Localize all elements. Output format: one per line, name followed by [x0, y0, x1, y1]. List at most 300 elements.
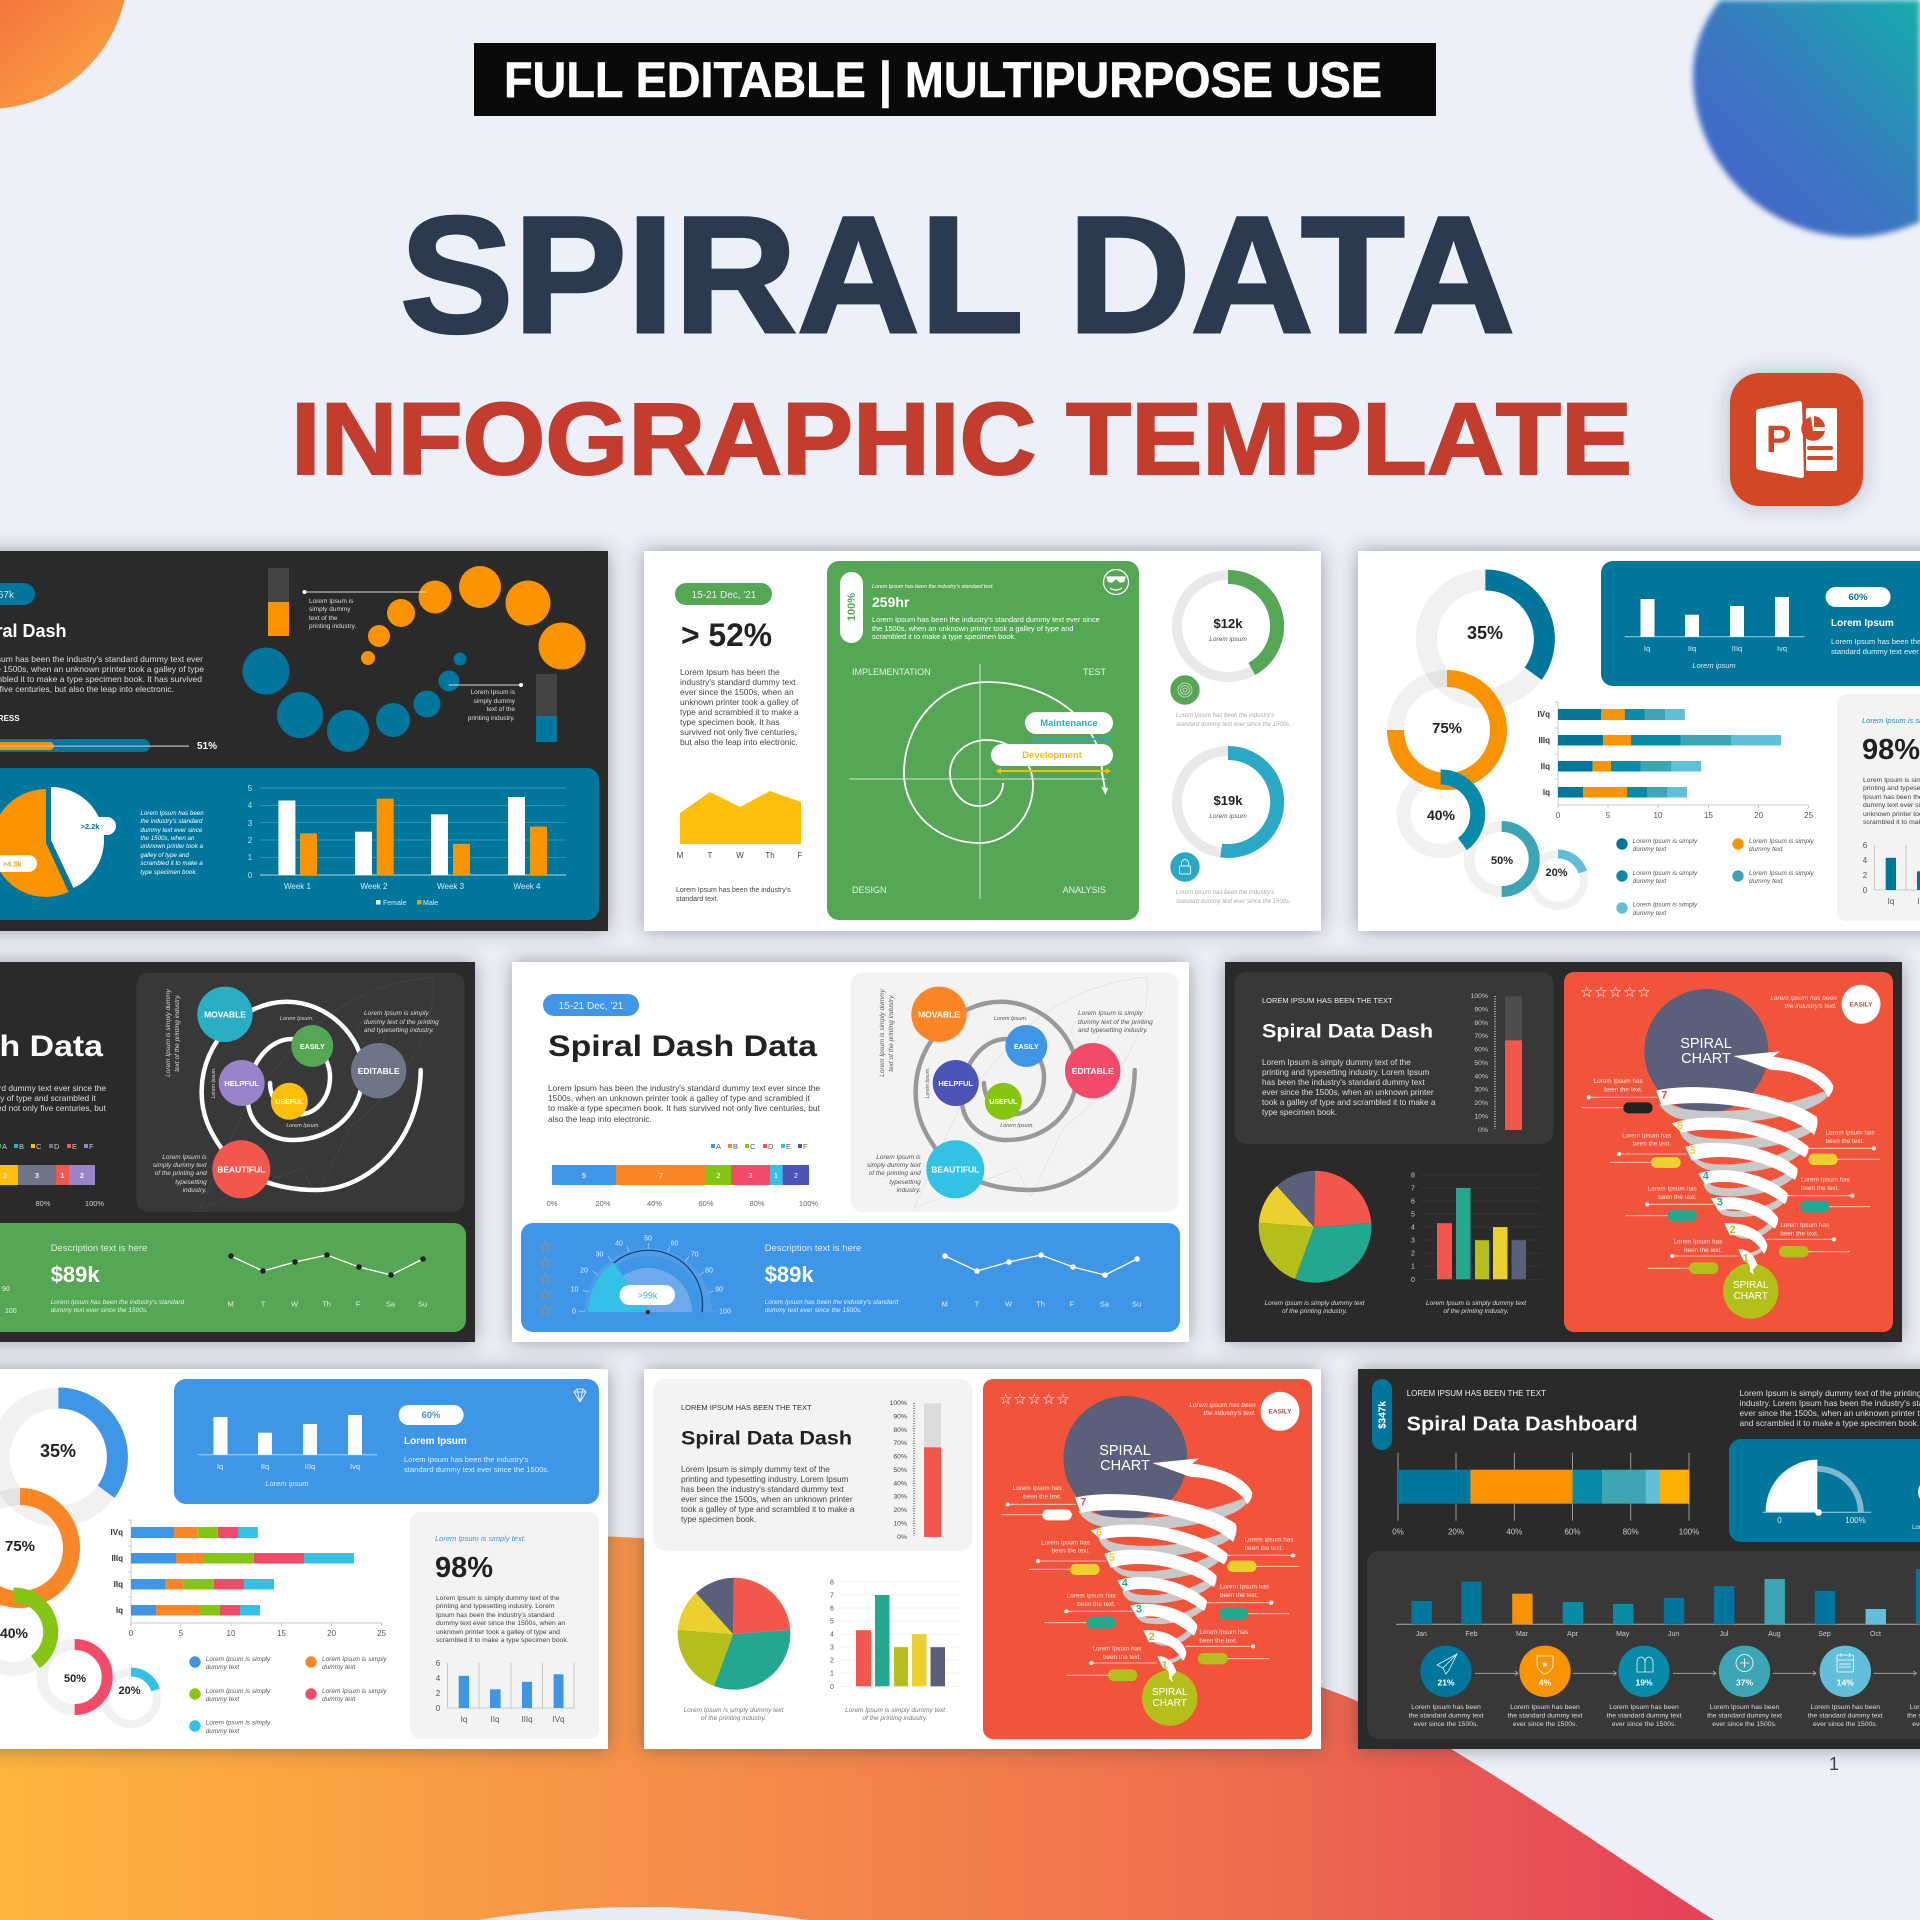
legend: Lorem Ipsum is simply: [206, 1720, 271, 1726]
panel heading text: the 1500s, when an unknown printer took a galley of type and: [872, 624, 1073, 633]
callout bottom: printing industry.: [468, 715, 515, 722]
gauge: [571, 1236, 731, 1316]
subtitle: INFOGRAPHIC TEMPLATE: [291, 382, 1632, 496]
tornado ribbon: Lorem Ipsum has: [1594, 1078, 1643, 1085]
panel: 98% stat: 98%: [1862, 734, 1920, 766]
bar caption: Lorem Ipsum is simply dummy text: [1426, 1300, 1527, 1307]
tornado ribbon: been the text.: [1604, 1086, 1643, 1093]
panel: green lower: Description text is here: [51, 1243, 147, 1254]
bubble notes: Lorem Ipsum is simply: [1078, 1010, 1143, 1017]
bubble notes: industry.: [897, 1187, 921, 1194]
step: 19%: [1618, 1646, 1670, 1697]
panel: 98% stat: scrambled it to make a type specimen book.: [436, 1637, 569, 1644]
tornado ribbon: 3: [1717, 1197, 1723, 1209]
percent scale bar: 40%: [1474, 1073, 1488, 1080]
footnote: Lorem Ipsum has been the industry's: [676, 887, 791, 894]
bubble: easily: EASILY: [1014, 1044, 1039, 1051]
bubble notes: Lorem Ipsum.: [1000, 1123, 1034, 1129]
paragraph: type specimen book. It has: [680, 717, 780, 727]
stacked horizontal bars: 20: [327, 1629, 337, 1638]
panel: intro: [653, 1379, 972, 1551]
paragraph: to make a type specimen book. It has survived not only five centuries, but: [548, 1103, 821, 1113]
step captions: [1409, 1704, 1920, 1728]
panel: green lower: dummy text ever since the 1500s.: [51, 1307, 148, 1314]
bubble notes: simply dummy text: [153, 1162, 208, 1169]
bubble: movable: MOVABLE: [204, 1010, 246, 1020]
tornado ribbon: been the text.: [1077, 1601, 1116, 1608]
bubble: editable: [351, 1043, 406, 1098]
bar chart: 0: [1411, 1277, 1415, 1284]
panel: 98% stat: Lorem Ipsum is simply dummy text of the: [436, 1595, 560, 1602]
panel: 98% stat: 6: [436, 1659, 441, 1668]
tornado ribbon: been the text.: [1658, 1194, 1697, 1201]
star rating: ☆☆☆☆☆: [999, 1390, 1070, 1408]
step: 37%: [1719, 1646, 1770, 1697]
callout top: text of the: [309, 615, 338, 622]
slide 8: white spiral chart: [644, 1369, 1321, 1749]
stacked bar: 60%: [698, 1199, 714, 1208]
panel: monthly bars: Apr: [1567, 1631, 1579, 1638]
legend: Lorem Ipsum is simply: [1633, 838, 1698, 845]
panel: 98% stat: 2: [436, 1689, 441, 1698]
top circle: SPIRAL: [1099, 1443, 1151, 1459]
bubble: helpful: HELPFUL: [224, 1079, 259, 1088]
panel: gauge: 100%: [1845, 1516, 1866, 1525]
bar chart: Male: [423, 900, 438, 907]
stacked horizontal bars: IIq: [1541, 762, 1550, 771]
legend: B: [19, 1142, 24, 1151]
panel: monthly bars: Sep: [1818, 1631, 1831, 1638]
stacked horizontal bars: IIIq: [111, 1554, 123, 1563]
progress bar: [0, 714, 217, 752]
panel: 98% stat: 4: [436, 1674, 441, 1683]
caption: Lorem Ipsum has been the industry's: [1176, 890, 1274, 896]
legend: Lorem Ipsum is simply: [1749, 838, 1814, 845]
legend: B: [733, 1142, 738, 1151]
tornado ribbon: 7: [1661, 1089, 1667, 1101]
tornado ribbon: Lorem Ipsum has: [1067, 1593, 1116, 1600]
tornado ribbon: been the text.: [1103, 1654, 1142, 1661]
step captions: the standard dummy text: [1508, 1713, 1583, 1720]
pie chart: [678, 1578, 790, 1690]
development label: Development: [1022, 750, 1083, 761]
gauge: >99k: [638, 1290, 658, 1300]
tornado ribbon: been the text.: [1801, 1185, 1840, 1192]
donut: $12k: [1177, 575, 1279, 677]
panel: spiral tornado: [1564, 972, 1893, 1332]
bar chart: 1: [830, 1670, 834, 1678]
tornado ribbon: been the text.: [1052, 1548, 1090, 1555]
panel: gauge: [1729, 1439, 1920, 1542]
panel: spiral bubbles: [850, 973, 1179, 1212]
bar chart: 5: [830, 1618, 834, 1626]
bar chart: 2: [830, 1658, 834, 1664]
step captions: ever since the 1500s.: [1513, 1721, 1577, 1728]
gauge: 20: [580, 1268, 588, 1274]
title: Spiral Dash Data: [548, 1030, 817, 1063]
italic note: scrambled it to make a: [140, 860, 203, 867]
legend: A: [2, 1142, 7, 1151]
stacked bar: 5: [582, 1171, 586, 1180]
panel: green lower: 100: [5, 1308, 17, 1315]
bubble notes: text of the printing industry.: [888, 994, 895, 1072]
donut: $19k: Lorem ipsum: [1209, 813, 1247, 820]
bubble notes: of the printing and: [155, 1170, 207, 1177]
step arrows: [1475, 1671, 1916, 1676]
panel: blue lower: Description text is here: [765, 1243, 861, 1254]
quadrant labels: DESIGN: [852, 885, 887, 895]
bar chart: Week 3: [437, 882, 465, 891]
bubble notes: [153, 988, 439, 1194]
stacked bar: 2: [716, 1171, 721, 1180]
bubble notes: Lorem Ipsum.: [286, 1123, 320, 1129]
panel: intro: printing and typesetting industry. Lorem Ipsum: [1262, 1068, 1430, 1077]
gauge: 10: [571, 1286, 578, 1294]
easily badge: EASILY: [1850, 1002, 1873, 1008]
panel: quarterly bars: Iq: [217, 1462, 223, 1471]
panel: quarterly bars: Iq: [1644, 644, 1650, 653]
panel: quarterly bars: Lorem Ipsum: [404, 1436, 467, 1447]
donut labels: 20%: [118, 1685, 141, 1697]
panel: 98% stat: Ipsum has been the industry's standard: [436, 1612, 555, 1619]
stacked bar: 3: [35, 1171, 39, 1180]
stacked horizontal bars: 15: [1704, 811, 1713, 820]
maintenance label: Maintenance: [1040, 718, 1098, 729]
bottom circle: [1142, 1670, 1197, 1726]
legend: E: [72, 1142, 77, 1151]
panel: quarterly bars: Lorem Ipsum has been the industry's: [404, 1455, 528, 1464]
slide 2: green spiral model: [644, 551, 1321, 931]
stacked horizontal bars: Iq: [1543, 788, 1550, 797]
bar chart: 2: [248, 836, 253, 845]
slide 7: blue donuts: [0, 1369, 608, 1749]
date pill: [543, 994, 639, 1016]
bubble notes: and typesetting industry.: [1078, 1027, 1148, 1034]
bar chart: 0: [248, 871, 253, 880]
area chart: T: [708, 851, 713, 860]
line chart: W: [291, 1300, 299, 1308]
bubble notes: Lorem Ipsum.: [211, 1068, 217, 1098]
bubble: useful: [985, 1083, 1022, 1120]
legend: C: [750, 1142, 756, 1151]
italic note: the 1500s, when an: [140, 835, 195, 842]
tornado ribbon: 2: [1149, 1631, 1155, 1643]
panel: quarterly bars: 60%: [421, 1410, 441, 1421]
bar chart: Week 4: [514, 882, 541, 891]
percent scale bar: 10%: [1474, 1113, 1488, 1120]
line chart: T: [261, 1300, 266, 1308]
panel: 98% stat: [1837, 694, 1920, 921]
legend: D: [768, 1142, 774, 1151]
panel: 98% stat: [410, 1512, 599, 1739]
bubble notes: text of the printing industry.: [174, 994, 181, 1072]
bubble: movable: [197, 987, 253, 1042]
legend: dummy text: [1749, 846, 1784, 853]
step: 4%: [1519, 1646, 1571, 1697]
stacked bar: 2: [80, 1171, 84, 1180]
bubble: easily: [1005, 1025, 1047, 1067]
line chart: Sa: [386, 1300, 396, 1308]
panel: monthly bars: Aug: [1768, 1631, 1781, 1638]
panel heading text: 259hr: [872, 594, 910, 610]
stacked horizontal bars: IIIq: [1538, 736, 1550, 745]
bar chart: 4: [248, 801, 253, 810]
panel: intro: Spiral Data Dash: [1262, 1021, 1433, 1043]
legend: F: [803, 1142, 808, 1151]
bottom circle: [1723, 1263, 1778, 1319]
spiral: [904, 682, 1108, 843]
legend: dummy text: [1633, 878, 1667, 885]
stacked bar: 40%: [1506, 1528, 1522, 1536]
donut: $19k: [1177, 751, 1279, 853]
panel: quarterly bars: Lorem Ipsum: [1831, 618, 1894, 629]
tornado ribbon: Lorem Ipsum has: [1245, 1537, 1294, 1544]
tornado ribbon: Lorem Ipsum has: [1780, 1222, 1829, 1229]
stacked horizontal bars: IIq: [114, 1580, 123, 1589]
rocket outline: [914, 977, 1147, 1208]
bubble notes: Lorem Ipsum.: [280, 1016, 314, 1022]
step captions: Lorem Ipsum has been: [1510, 1704, 1580, 1711]
tornado ribbon: Lorem Ipsum has: [1801, 1177, 1850, 1184]
donut group: [0, 1398, 157, 1724]
tornado ribbon: Lorem Ipsum has: [1220, 1584, 1269, 1591]
top circle: [1063, 1396, 1187, 1520]
slide 9: spiral data dashboard: [1358, 1369, 1920, 1749]
caption: standard dummy text ever since the 1500s.: [1176, 722, 1291, 728]
stacked horizontal bars: IVq: [1538, 710, 1550, 719]
paragraph: type and scrambled it to make a: [680, 707, 799, 717]
gauge: 30: [596, 1252, 603, 1258]
step: 14%: 14%: [1837, 1678, 1854, 1688]
bar chart: 7: [830, 1592, 834, 1600]
stacked bar: 2: [3, 1171, 7, 1180]
bar caption: of the printing industry.: [862, 1715, 928, 1722]
bubble: helpful: [933, 1060, 979, 1106]
step: 21%: 21%: [1437, 1678, 1455, 1688]
bar caption: of the printing industry.: [1443, 1308, 1509, 1315]
panel: quarterly bars: 60%: [1848, 592, 1868, 603]
tornado ribbon: Lorem Ipsum has: [1092, 1646, 1141, 1653]
legend: dummy text: [1633, 846, 1667, 853]
donut labels: 75%: [1432, 720, 1462, 737]
panel: monthly bars: Feb: [1465, 1631, 1478, 1638]
bar chart: 8: [830, 1580, 834, 1586]
tornado ribbon: Lorem Ipsum has: [1041, 1539, 1090, 1546]
percent scale bar: 70%: [893, 1440, 907, 1447]
gauge: 0: [572, 1308, 576, 1316]
legend: [189, 1656, 387, 1735]
paragraph: unknown printer took a galley of: [680, 697, 799, 707]
tornado ribbon: 5: [1109, 1552, 1115, 1564]
callout top: [302, 590, 426, 630]
line chart: M: [227, 1300, 234, 1308]
bottom gradient wave: [0, 1533, 1714, 1920]
line chart: [227, 1252, 427, 1308]
bubble notes: Lorem Ipsum is: [162, 1154, 207, 1161]
panel: intro: has been the industry's standard dummy text: [1262, 1078, 1425, 1087]
panel: quarterly bars: Ivq: [350, 1462, 360, 1471]
panel: quarterly bars: Ivq: [1777, 644, 1787, 653]
bar chart: [1411, 1172, 1541, 1284]
legend: A: [716, 1142, 721, 1151]
percent scale bar: 30%: [1474, 1087, 1488, 1094]
tornado ribbon: Lorem Ipsum has: [1826, 1130, 1875, 1137]
top-left corner blob: [0, 0, 124, 108]
bubble: beautiful: [926, 1140, 984, 1198]
panel: 98% stat: Lorem Ipsum is simply text.: [435, 1534, 526, 1543]
bubble notes: Lorem Ipsum is simply dummy: [165, 988, 172, 1077]
legend: Lorem Ipsum is simply: [206, 1688, 271, 1695]
panel: monthly bars: Jun: [1668, 1631, 1679, 1638]
legend: D: [54, 1142, 60, 1151]
step captions: the standard dummy text: [1409, 1713, 1484, 1720]
pie caption: Lorem Ipsum is simply dummy text: [1265, 1300, 1366, 1307]
percent scale bar: 30%: [893, 1494, 907, 1501]
tornado ribbon: 1: [1743, 1253, 1749, 1265]
step captions: the standard dummy text: [1607, 1713, 1682, 1720]
bubble notes: simply dummy text: [867, 1162, 922, 1169]
rocket outline: [200, 977, 433, 1208]
spiral: [916, 1002, 1135, 1190]
panel: intro: type specimen book.: [681, 1515, 756, 1524]
stacked horizontal bars: 25: [377, 1629, 387, 1638]
spiral bubbles: [242, 566, 586, 752]
icon: powerpoint: P: [1766, 419, 1791, 461]
bar chart: 2: [1411, 1250, 1415, 1258]
stacked bar: 3: [748, 1171, 753, 1180]
star rating: ☆☆☆☆☆: [1580, 983, 1651, 1001]
paragraph: Lorem Ipsum has been the industry's standard dummy text ever since the: [548, 1083, 820, 1093]
percent scale bar: 80%: [893, 1427, 907, 1434]
date pill: 15-21 Dec, '21: [559, 1001, 624, 1012]
panel: monthly bars: [1367, 1551, 1920, 1739]
pie chart: >4.3k: [3, 860, 22, 868]
tornado ribbon: 2: [1730, 1224, 1736, 1236]
panel: monthly bars: Jul: [1720, 1631, 1729, 1638]
tornado ribbon: 3: [1136, 1604, 1142, 1616]
top circle: CHART: [1681, 1051, 1731, 1067]
panel: blue lower: $89k: [765, 1262, 814, 1287]
panel: 98% stat: IIIq: [521, 1715, 533, 1724]
legend: [1616, 838, 1814, 917]
slide 6: dark spiral chart: [1225, 962, 1902, 1342]
percent scale bar: 100%: [1471, 993, 1488, 1000]
stacked bar: 0%: [547, 1199, 558, 1208]
panel: quarterly bars: [174, 1379, 599, 1504]
area chart: F: [798, 851, 803, 860]
bar chart: 4: [830, 1632, 834, 1638]
top circle: SPIRAL: [1680, 1036, 1732, 1052]
bubble notes: and typesetting industry.: [364, 1027, 434, 1034]
percent scale bar: 40%: [893, 1480, 907, 1487]
quadrant labels: IMPLEMENTATION: [852, 667, 931, 677]
legend: dummy text: [322, 1664, 357, 1671]
percent scale bar: [890, 1400, 941, 1541]
slide 1: dark spiral dash: [0, 551, 608, 931]
caption: standard dummy text ever since the 1500s.: [1176, 899, 1291, 905]
top banner: FULL EDITABLE | MULTIPURPOSE USE: [504, 52, 1382, 109]
bar chart: 0: [830, 1684, 834, 1691]
bubble notes: Lorem Ipsum is: [876, 1154, 921, 1161]
panel: green spiral: [827, 561, 1139, 920]
panel: intro: type specimen book.: [1262, 1108, 1337, 1117]
paragraph: also the leap into electronic.: [548, 1114, 652, 1124]
panel: quarterly bars: IIq: [1688, 644, 1696, 653]
callout bottom: Lorem Ipsum is: [471, 689, 516, 696]
legend: [711, 1142, 808, 1151]
paragraph: and scrambled it to make a type specimen book.: [1740, 1418, 1919, 1428]
gauge: 80: [705, 1268, 713, 1274]
line chart: Sa: [1100, 1300, 1110, 1308]
tornado ribbon: been the text.: [1220, 1592, 1259, 1599]
quadrant labels: [852, 667, 1106, 895]
date pill: [675, 583, 772, 605]
tornado ribbon: Lorem Ipsum has: [1013, 1485, 1062, 1492]
panel heading text: Lorem Ipsum has been the industry's standard text.: [872, 584, 994, 590]
bubble: movable: MOVABLE: [918, 1010, 960, 1020]
panel: intro: Lorem Ipsum is simply dummy text of the: [681, 1465, 830, 1474]
panel: quarterly bars: IIIq: [1732, 644, 1742, 653]
step captions: Lorem Ipsum has been: [1710, 1704, 1779, 1711]
line chart: Th: [322, 1300, 331, 1308]
bar chart: 7: [1411, 1186, 1415, 1192]
legend: dummy text: [206, 1664, 240, 1671]
panel: intro: Lorem Ipsum is simply dummy text of the: [1262, 1058, 1411, 1067]
line chart: F: [1070, 1300, 1075, 1308]
panel: 98% stat: 6: [1863, 841, 1868, 850]
stacked bar: 0%: [1392, 1528, 1404, 1536]
percent scale bar: 50%: [893, 1467, 907, 1474]
bar chart: 8: [1411, 1172, 1415, 1180]
italic note: unknown printer took a: [140, 843, 204, 850]
tornado ribbon: Lorem Ipsum has: [1199, 1629, 1248, 1636]
paragraph: ever since the 1500s, when an: [680, 687, 794, 697]
tornado ribbon: been the text.: [1023, 1493, 1062, 1500]
bar chart: [830, 1580, 960, 1691]
legend: dummy text: [322, 1696, 357, 1703]
legend: F: [89, 1142, 94, 1151]
donut labels: 50%: [1491, 855, 1513, 867]
panel: 98% stat: printing and typesetting industry. Lorem: [436, 1603, 555, 1610]
percent scale bar: 20%: [1474, 1100, 1488, 1107]
panel: intro: Spiral Data Dash: [681, 1428, 852, 1450]
italic note: dummy text ever since: [140, 827, 203, 834]
page number: 1: [1829, 1754, 1839, 1774]
tornado ribbon: Lorem Ipsum has: [1673, 1239, 1722, 1246]
bubble: beautiful: [212, 1140, 270, 1198]
percent scale bar: 10%: [893, 1520, 907, 1527]
icon: diamond: [574, 1389, 586, 1402]
panel: 98% stat: 4: [1863, 856, 1868, 865]
bubble: editable: EDITABLE: [358, 1066, 400, 1076]
quadrant labels: TEST: [1083, 667, 1106, 677]
bubble: movable: [911, 987, 967, 1042]
percent scale bar: 100%: [890, 1400, 907, 1407]
panel: 98% stat: IIq: [491, 1715, 499, 1724]
tornado ribbon: 5: [1690, 1145, 1696, 1157]
donut labels: [1427, 623, 1568, 879]
stacked horizontal bars: 5: [1606, 811, 1611, 820]
panel heading text: [872, 584, 1100, 641]
bubble: beautiful: BEAUTIFUL: [931, 1164, 979, 1174]
bubble: useful: [271, 1083, 308, 1120]
panel: quarterly bars: standard dummy text ever since the 1500s.: [404, 1465, 549, 1474]
paragraph: 1500s, when an unknown printer took a galley of type and scrambled it: [548, 1093, 810, 1103]
tornado ribbon: been the text.: [1826, 1138, 1864, 1145]
legend: dummy text: [206, 1728, 240, 1735]
stacked bar: 7: [659, 1171, 663, 1180]
100% pill: 100%: [846, 593, 858, 621]
